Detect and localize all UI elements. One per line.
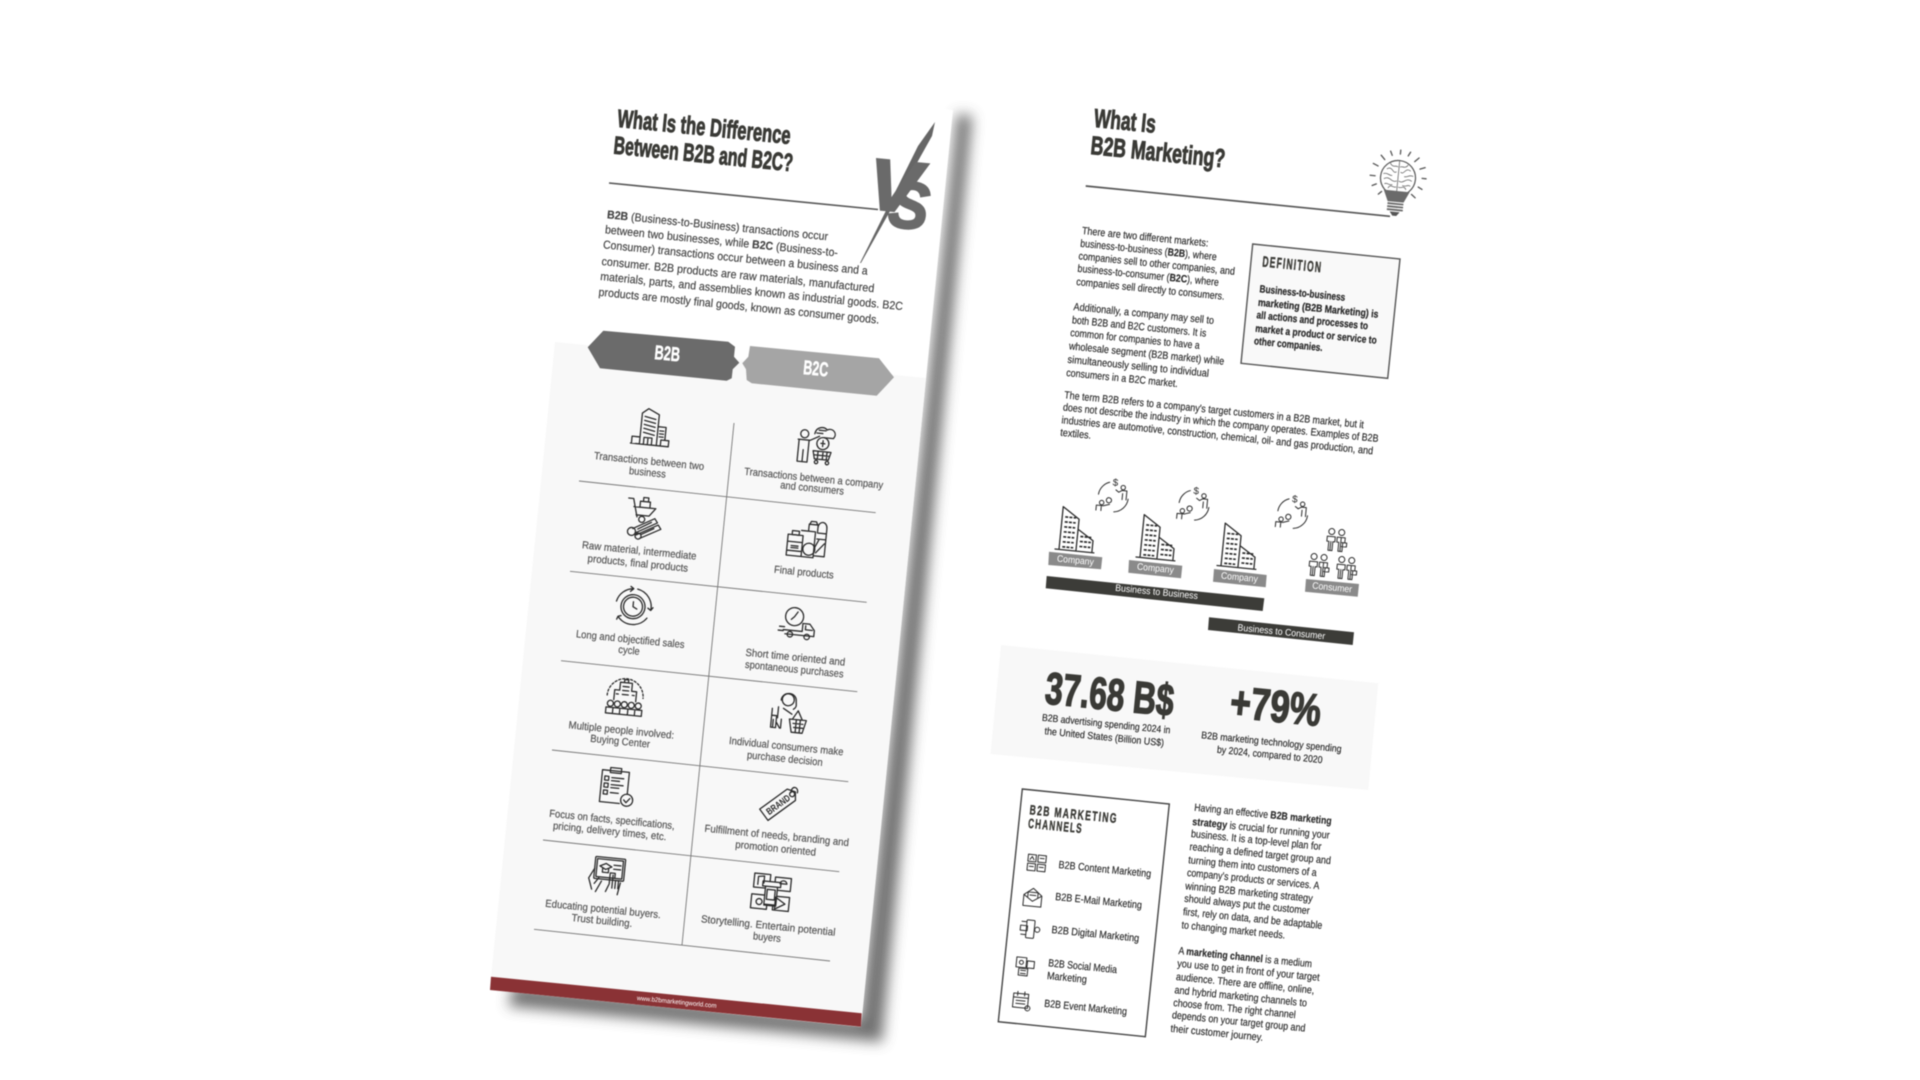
text: marketing strategy: Having an effective B2B marketing <box>1194 802 1332 827</box>
text: two different markets: companies sell to other companies, and <box>1078 250 1236 278</box>
text: two different markets: companies sell directly to consumers. <box>1076 276 1225 303</box>
text: individual consumers: purchase decision <box>746 749 823 769</box>
icon: final products <box>786 519 827 559</box>
intro paragraph: B2B (Business-to-Business) transactions occur <box>606 209 829 243</box>
icon: exchange 3 <box>1275 493 1310 530</box>
icon: exchange 3: $ <box>1292 494 1299 506</box>
intro paragraph: products are mostly final goods, known as consumer goods. <box>598 287 880 327</box>
icon: consumer group 1 <box>1326 528 1348 552</box>
icon: company building 1 <box>1055 506 1098 553</box>
text: marketing strategy: to changing market needs. <box>1181 919 1286 942</box>
text: marketing channel: and hybrid marketing channels to <box>1174 984 1308 1010</box>
title: What Is B2B Marketing?: B2B Marketing? <box>1089 130 1227 173</box>
text: final products: Final products <box>773 564 834 582</box>
label: company 1: Company <box>1056 554 1095 568</box>
diagram: business to business and consumer <box>1046 476 1359 645</box>
intro paragraph: consumer. B2B products are raw materials, manufactured <box>601 256 875 295</box>
heading: channels <box>1027 802 1119 836</box>
stat caption: advertising spending <box>1041 713 1171 749</box>
text: marketing strategy: winning B2B marketing strategy <box>1184 880 1314 905</box>
stat caption: marketing technology: B2B marketing technology spending <box>1201 730 1342 755</box>
bar: business to consumer: Business to Consumer <box>1237 623 1326 642</box>
footer band: www.b2bmarketingworld.com <box>636 995 717 1010</box>
icon: exchange 2 <box>1177 485 1211 521</box>
text: fulfillment of needs: Fulfillment of needs, branding and <box>704 823 850 849</box>
text: two different markets <box>1076 225 1236 303</box>
label: company 2: Company <box>1136 562 1175 576</box>
icon: person with cart and money <box>796 425 836 465</box>
text: marketing channel: depends on your target group and <box>1171 1009 1306 1035</box>
icon: digital marketing <box>1019 919 1041 939</box>
text: storytelling: Storytelling. Entertain potential <box>700 913 836 939</box>
text: raw material <box>581 539 697 575</box>
stat caption: marketing technology <box>1201 730 1342 766</box>
label: consumer: Consumer <box>1312 581 1353 595</box>
text: the term B2B: industries are automotive, construction, chemical, oil- and gas production, and <box>1061 414 1374 457</box>
icon: company building 3 <box>1217 523 1260 569</box>
text: additionally: Additionally, a company may sell to <box>1073 301 1215 327</box>
text: transactions between company and consumers: and consumers <box>780 479 845 498</box>
stat: +79%: +79% <box>1228 676 1324 736</box>
panel: statistics <box>990 645 1378 790</box>
VS emblem: V <box>864 144 931 230</box>
ribbon: B2C: B2C <box>802 357 829 381</box>
icon: consumer group 3 <box>1336 556 1358 580</box>
text: additionally: consumers in a B2C market. <box>1066 367 1178 390</box>
title rule <box>609 183 878 210</box>
VS emblem <box>860 122 935 263</box>
title: What Is the Difference Between B2B and B2C?: What Is the Difference <box>616 105 792 150</box>
callout: definition box: all actions and processes to <box>1256 309 1369 332</box>
text: additionally: wholesale segment (B2B market) while <box>1068 340 1225 368</box>
row: event marketing: B2B Event Marketing <box>1044 998 1128 1018</box>
text: marketing strategy: company's products or services. A <box>1186 867 1320 892</box>
icon: tablet with hands <box>587 856 626 895</box>
text: marketing channel: A marketing channel is a medium <box>1178 945 1313 970</box>
callout: definition box: DEFINITION <box>1262 254 1323 276</box>
text: storytelling: buyers <box>752 930 781 945</box>
VS emblem: S <box>886 166 933 244</box>
text: raw material: products, final products <box>587 553 689 575</box>
label: company 1 <box>1048 552 1102 569</box>
text: educating potential buyers: Educating potential buyers. <box>545 898 661 921</box>
text: the term B2B <box>1060 389 1379 457</box>
icon: content marketing <box>1027 854 1046 872</box>
panel: B2B marketing channels <box>998 789 1169 1037</box>
title: What Is B2B Marketing? <box>1089 103 1227 173</box>
title: What Is the Difference Between B2B and B2C? <box>612 105 794 177</box>
text: marketing strategy: first, rely on data, and be adaptable <box>1182 906 1323 932</box>
text: two different markets: business-to-business (B2B), where <box>1080 238 1217 263</box>
text: additionally: common for companies to have a <box>1070 327 1200 352</box>
ribbon: B2C <box>742 346 894 396</box>
callout: definition box <box>1241 244 1400 378</box>
page sheet <box>490 73 953 1027</box>
callout: definition box: other companies. <box>1253 335 1323 354</box>
text: individual consumers <box>728 735 844 769</box>
bar: business to business: Business to Business <box>1115 583 1199 602</box>
icon: exchange 1: $ <box>1112 478 1119 489</box>
text: multiple people: Multiple people involved: <box>568 719 675 742</box>
icon: storytelling media collage <box>750 873 792 912</box>
footer band <box>490 977 862 1027</box>
text: focus on facts <box>549 808 675 843</box>
text: long sales cycle: cycle <box>618 644 640 658</box>
light grey comparison background <box>491 342 926 1013</box>
icon: brand tag <box>760 784 802 820</box>
icon: event marketing <box>1012 991 1031 1011</box>
text: marketing channel: choose from. The right channel <box>1173 997 1296 1021</box>
row: social media marketing: B2B Social Media <box>1048 957 1118 976</box>
text: focus on facts: pricing, delivery times, etc. <box>552 820 667 843</box>
page shadow <box>508 114 972 1042</box>
icon: consumer group 2 <box>1308 553 1330 577</box>
stat caption: advertising spending: the United States (Billion US$) <box>1044 726 1165 749</box>
text: the term B2B: textiles. <box>1060 427 1092 442</box>
text: focus on facts: Focus on facts, specifications, <box>549 808 675 832</box>
icon: company building 2 <box>1136 514 1179 561</box>
icon: woman with basket <box>770 692 809 734</box>
icon: speedometer and truck <box>778 606 816 640</box>
intro paragraph <box>598 209 903 327</box>
text: educating potential buyers: Trust building. <box>571 912 633 930</box>
text: marketing channel: audience. There are offline, online, <box>1175 971 1315 997</box>
text: additionally: both B2B and B2C customers. It is <box>1071 314 1207 340</box>
heading: channels: CHANNELS <box>1027 816 1084 836</box>
intro paragraph: between two businesses, while B2C (Business-to- <box>604 224 839 260</box>
bar: business to consumer <box>1208 617 1354 645</box>
text: marketing strategy: strategy is crucial for running your <box>1192 816 1331 842</box>
text: marketing channel <box>1170 945 1320 1044</box>
text: raw material: Raw material, intermediate <box>581 539 697 563</box>
text: additionally <box>1066 301 1225 390</box>
panel: right page What Is B2B Marketing <box>990 103 1429 1044</box>
callout: definition box: marketing (B2B Marketing) is <box>1257 297 1379 321</box>
text: long sales cycle: Long and objectified sales <box>575 628 685 651</box>
icon: exchange 2: $ <box>1193 486 1200 497</box>
icon: social media <box>1015 957 1035 977</box>
stat caption: marketing technology: by 2024, compared to 2020 <box>1216 745 1323 766</box>
text: marketing strategy: business. It is a top-level plan for <box>1190 828 1322 853</box>
text: individual consumers: Individual consumers make <box>728 735 844 758</box>
title: What Is B2B Marketing?: What Is <box>1093 103 1157 139</box>
text: two different markets: There are two different markets: <box>1081 225 1209 250</box>
panel: left page B2B vs B2C <box>490 73 972 1042</box>
icon: clipboard checklist <box>599 767 636 807</box>
ribbon: B2B: B2B <box>654 342 681 367</box>
icon: brand tag: BRAND <box>764 793 793 818</box>
intro paragraph: materials, parts, and assemblies known as industrial goods. B2C <box>600 271 903 313</box>
text: marketing channel: their customer journey. <box>1170 1023 1264 1044</box>
label: company 3 <box>1213 569 1267 587</box>
title: What Is the Difference Between B2B and B2C?: Between B2B and B2C? <box>612 132 794 177</box>
text: transactions between company and consumers: Transactions between a company <box>744 466 884 492</box>
icon: brain light bulb <box>1366 147 1429 219</box>
text: additionally: simultaneously selling to individual <box>1067 354 1209 380</box>
icon: wheelbarrow and logs <box>625 496 664 541</box>
text: marketing strategy: reaching a defined target group and <box>1189 841 1332 867</box>
text: the term B2B: The term B2B refers to a company's target customers in a B2B market, but it <box>1064 389 1364 431</box>
text: transactions between two business: business <box>628 465 666 481</box>
text: marketing channel: you use to get in front of your target <box>1177 958 1320 984</box>
stat: 37.68 B$: 37.68 B$ <box>1043 663 1176 726</box>
title rule <box>1086 186 1390 216</box>
heading: channels: B2B MARKETING <box>1029 802 1119 826</box>
ribbon: B2B <box>588 331 739 381</box>
bar: business to business <box>1046 576 1264 611</box>
row: social media marketing <box>1046 957 1118 986</box>
icon: office building <box>630 407 672 447</box>
icon: buying center <box>605 677 645 716</box>
icon: email marketing <box>1023 887 1043 907</box>
text: two different markets: business-to-consumer (B2C), where <box>1077 263 1220 289</box>
callout: definition box: Business-to-business <box>1259 283 1346 304</box>
text: short time purchases: spontaneous purchases <box>744 659 844 681</box>
stat caption: advertising spending: B2B advertising spending 2024 in <box>1041 713 1171 736</box>
intro paragraph: Consumer) transactions occur between a business and a <box>602 239 869 278</box>
row: content marketing: B2B Content Marketing <box>1058 859 1152 880</box>
row: social media marketing: Marketing <box>1046 970 1088 986</box>
label: company 3: Company <box>1220 571 1259 585</box>
callout: definition box: market a product or service to <box>1255 323 1377 347</box>
text: multiple people: Buying Center <box>590 733 651 751</box>
row: digital marketing: B2B Digital Marketing <box>1051 924 1140 945</box>
label: company 2 <box>1128 560 1182 578</box>
text: fulfillment of needs: promotion oriented <box>735 839 817 859</box>
text: the term B2B: does not describe the industry in which the company operates. Examples of B2B <box>1062 402 1379 445</box>
text: marketing strategy: should always put the customer <box>1184 893 1311 917</box>
text: marketing strategy: turning them into customers of a <box>1188 854 1317 879</box>
text: marketing strategy <box>1181 802 1332 942</box>
icon: clock cycle <box>614 585 655 626</box>
icon: exchange 1 <box>1096 476 1130 513</box>
text: transactions between two business: Transactions between two <box>593 450 705 473</box>
text: short time purchases <box>744 647 846 681</box>
comparison grid lines <box>534 423 876 961</box>
row: email marketing: B2B E-Mail Marketing <box>1055 891 1143 912</box>
text: short time purchases: Short time oriented and <box>745 647 846 669</box>
